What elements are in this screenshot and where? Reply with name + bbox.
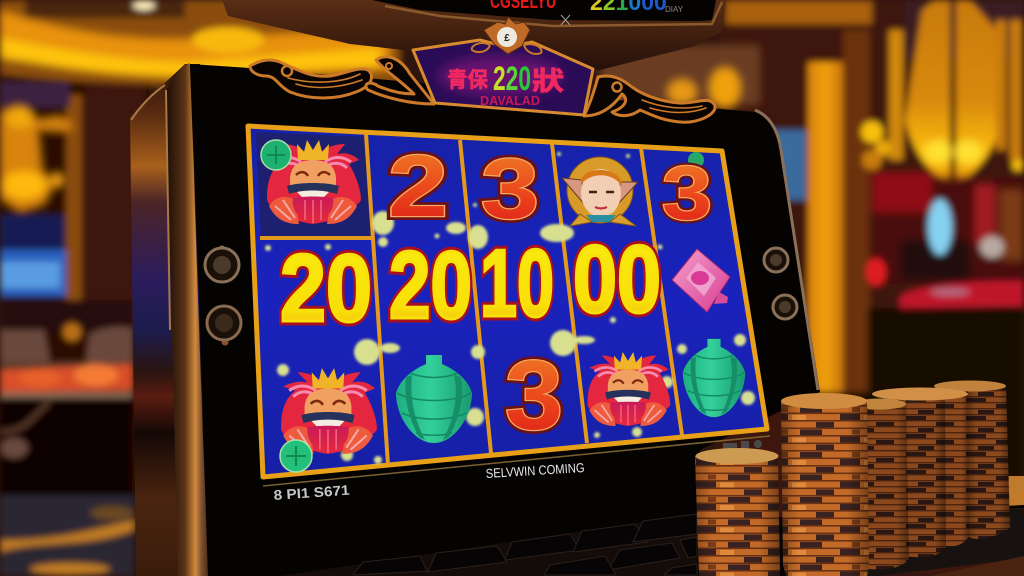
top display small label: DIAY xyxy=(665,5,684,14)
red spot xyxy=(866,258,886,286)
red number 3 lower reel: 3 xyxy=(505,340,563,450)
small yellow orbs xyxy=(861,121,1024,171)
red table xyxy=(900,281,1024,308)
digits 10 xyxy=(480,230,554,337)
right chandelier xyxy=(889,0,1022,184)
digits 10: 10 xyxy=(480,230,554,337)
tan desk corner xyxy=(1007,476,1024,512)
cabinet side panel xyxy=(130,63,208,576)
marquee pink glyphs left: 青保 xyxy=(447,69,488,92)
poker chip stacks xyxy=(695,380,1010,576)
dark wall left xyxy=(0,74,150,576)
red number 3 right reel: 3 xyxy=(662,151,712,236)
screen frame xyxy=(248,126,767,477)
digits 10: 10 xyxy=(480,230,554,337)
status text center: SELVWIN COMING xyxy=(485,460,585,481)
green orb top-right xyxy=(688,152,704,168)
patterned floor xyxy=(0,495,134,576)
right scroll ornament xyxy=(584,76,715,122)
green jar symbol left xyxy=(396,355,472,443)
marquee pink glyph right: 狀 xyxy=(532,66,564,96)
white light xyxy=(980,236,1004,258)
green orb bottom-left xyxy=(280,440,312,472)
reel screen xyxy=(248,126,767,477)
left window blue glow xyxy=(0,215,66,296)
digits 20: 20 xyxy=(280,235,372,342)
green orb top-left xyxy=(261,140,291,170)
marquee sign xyxy=(250,17,715,122)
marquee 220: 220 xyxy=(493,60,531,98)
chip stack far right xyxy=(934,380,1010,539)
bronze side strip xyxy=(166,63,208,576)
right wall xyxy=(720,0,1024,576)
big yellow win digits xyxy=(280,226,661,342)
chip stack short front xyxy=(695,448,780,576)
red number 2: 2 xyxy=(388,138,448,235)
left window frame xyxy=(66,95,82,300)
digits 00: 00 xyxy=(573,226,661,333)
counter wood edge xyxy=(930,556,1024,576)
red number 3 lower reel: 3 xyxy=(505,340,563,450)
marquee crest: £ xyxy=(504,33,510,44)
red number 3: 3 xyxy=(481,142,539,237)
chip stack narrow xyxy=(854,398,909,570)
left ceiling xyxy=(0,0,400,85)
monster symbol bottom-middle xyxy=(588,352,670,426)
left restaurant furniture xyxy=(0,300,132,503)
small cross mark xyxy=(561,15,570,25)
red number 3: 3 xyxy=(481,142,539,237)
monster symbol bottom-left xyxy=(281,368,377,454)
marquee plate xyxy=(413,40,593,115)
lamp bright spots xyxy=(924,140,982,164)
red dim seating xyxy=(872,172,1024,283)
left ceiling ring light xyxy=(192,27,264,53)
left ceiling glowing arc xyxy=(0,10,390,78)
digits 00: 00 xyxy=(573,226,661,333)
chip stack back centre right xyxy=(940,394,969,546)
marquee subtitle: DAVALAD xyxy=(480,93,540,108)
small lower-right icons xyxy=(723,440,762,450)
lower screen gold rule xyxy=(263,436,770,486)
wooden column xyxy=(808,62,843,392)
light sparkles xyxy=(265,152,755,464)
bright panel edge xyxy=(131,85,170,330)
marquee crest xyxy=(472,17,542,54)
digits 20: 20 xyxy=(280,235,372,342)
right ceiling band xyxy=(726,0,872,24)
top-left cell darker xyxy=(256,132,371,239)
blue light xyxy=(928,199,952,255)
cabinet front xyxy=(190,64,1024,576)
top display box xyxy=(222,0,726,70)
chip stack back centre xyxy=(872,388,968,557)
left scroll ornament xyxy=(250,57,434,104)
dark area under table xyxy=(868,308,1024,478)
black counter xyxy=(840,508,1024,576)
digits 20 second reel: 20 xyxy=(389,232,472,339)
monster symbol top-left xyxy=(267,140,361,224)
red number 2: 2 xyxy=(388,138,448,235)
status text left: 8 PI1 S671 xyxy=(273,482,350,503)
elf face symbol xyxy=(562,157,638,226)
keyboard panel xyxy=(280,514,697,576)
left side knobs xyxy=(205,246,241,346)
green jar symbol right xyxy=(683,339,745,417)
digits 20 second reel: 20 xyxy=(389,232,472,339)
red number 3 right reel: 3 xyxy=(662,151,712,236)
reel dividers xyxy=(260,134,682,465)
ceiling spotlight xyxy=(133,0,155,10)
cabinet right edge xyxy=(755,110,818,390)
behind-marquee lights xyxy=(600,45,760,108)
right side knobs xyxy=(764,248,797,319)
chip stack tall front xyxy=(781,393,869,576)
pink gem symbol xyxy=(672,249,730,312)
left pendant lamp xyxy=(0,105,72,212)
distant blue screen xyxy=(772,130,806,200)
